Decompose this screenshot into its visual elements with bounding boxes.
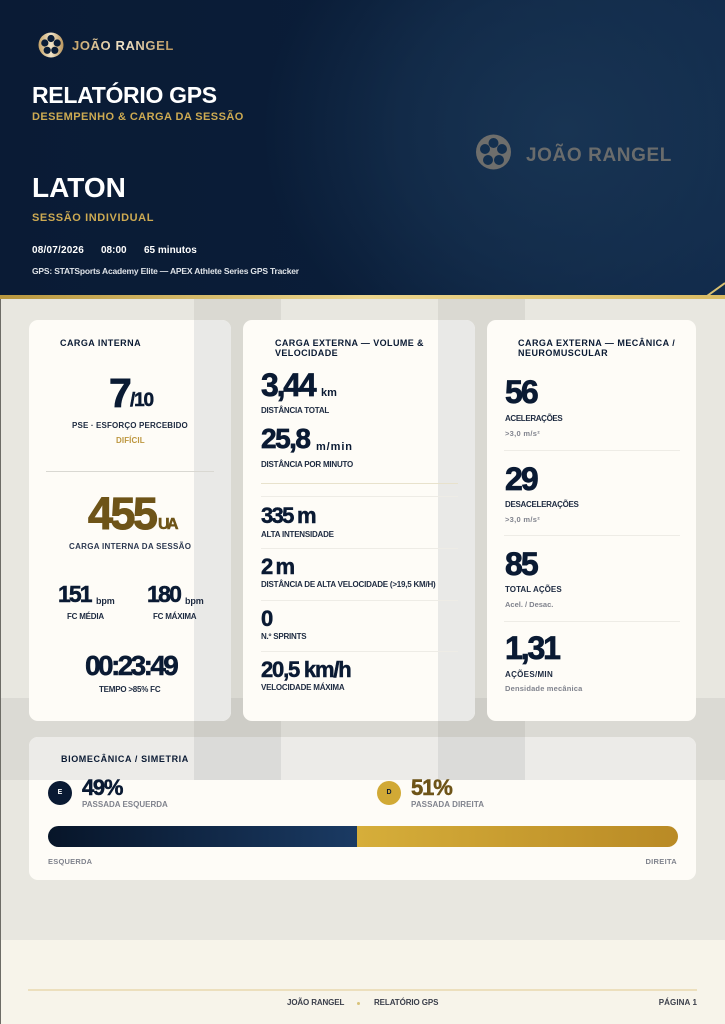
time above 85% value: 00:23:49	[85, 650, 176, 680]
max speed value: 20,5 km/h	[261, 657, 350, 682]
time above 85% label: TEMPO >85% FC	[99, 685, 160, 694]
title: RELATÓRIO GPS	[32, 82, 217, 108]
total actions value: 85	[505, 546, 537, 582]
sprints label: N.º SPRINTS	[261, 632, 306, 641]
maximum heart rate unit: bpm	[185, 596, 204, 606]
total distance label: DISTÂNCIA TOTAL	[261, 406, 329, 415]
distance per minute value: 25,8	[261, 422, 310, 454]
PSE label: PSE · ESFORÇO PERCEBIDO	[72, 421, 188, 430]
sprints value: 0	[261, 606, 273, 631]
session time: 08:00	[101, 244, 127, 256]
heading	[275, 338, 424, 358]
accelerations value: 56	[505, 374, 537, 410]
total actions label: TOTAL AÇÕES	[505, 585, 562, 594]
panel: biomecanica	[29, 737, 696, 880]
heading	[518, 338, 675, 358]
PSE value: 7	[109, 370, 132, 416]
right badge: D	[386, 789, 392, 796]
corner accent	[706, 282, 725, 296]
left badge	[48, 781, 72, 805]
footer report name: RELATÓRIO GPS	[374, 998, 438, 1007]
logo	[38, 32, 174, 58]
average heart rate unit: bpm	[96, 596, 115, 606]
page number: PÁGINA 1	[659, 998, 697, 1007]
heading: CARGA INTERNA	[60, 338, 141, 348]
right label: PASSADA DIREITA	[411, 800, 484, 809]
heading: BIOMECÂNICA / SIMETRIA	[61, 754, 189, 764]
decelerations threshold: >3,0 m/s²	[505, 515, 540, 524]
max speed label: VELOCIDADE MÁXIMA	[261, 683, 344, 692]
gold rule	[0, 295, 725, 299]
footer brand: JOÃO RANGEL	[287, 998, 344, 1007]
right axis label: DIREITA	[645, 857, 677, 866]
left axis label: ESQUERDA	[48, 857, 92, 866]
watermark logo	[476, 134, 672, 170]
total distance unit: km	[321, 387, 337, 399]
high speed distance label: DISTÂNCIA DE ALTA VELOCIDADE (>19,5 KM/H)	[261, 580, 435, 589]
left label: PASSADA ESQUERDA	[82, 800, 168, 809]
panel: carga interna	[29, 320, 231, 721]
session load unit: UA	[158, 516, 176, 533]
average heart rate: 151	[58, 581, 91, 607]
panel: carga externa volume	[243, 320, 475, 721]
decelerations value: 29	[505, 461, 537, 497]
maximum heart rate label: FC MÁXIMA	[153, 612, 196, 621]
total distance value: 3,44	[261, 367, 314, 403]
high intensity value: 335 m	[261, 503, 315, 528]
panel: carga externa mecanica	[487, 320, 696, 721]
decelerations label: DESACELERAÇÕES	[505, 500, 579, 509]
left segment	[48, 826, 357, 847]
session duration: 65 minutos	[144, 244, 197, 256]
panel: carga externa volume content	[261, 338, 458, 692]
right segment	[357, 826, 678, 847]
left badge: E	[58, 789, 62, 796]
session type: SESSÃO INDIVIDUAL	[32, 212, 154, 224]
heading: NEUROMUSCULAR	[518, 348, 608, 358]
accelerations label: ACELERAÇÕES	[505, 414, 562, 423]
accelerations threshold: >3,0 m/s²	[505, 429, 540, 438]
gold divider	[261, 483, 458, 484]
PSE scale: /10	[130, 390, 153, 411]
total actions note: Acel. / Desac.	[505, 600, 553, 609]
gps device: GPS: STATSports Academy Elite — APEX Athlete Series GPS Tracker	[32, 266, 299, 276]
high speed distance value: 2 m	[261, 554, 293, 579]
average heart rate label: FC MÉDIA	[67, 612, 104, 621]
actions per minute label: AÇÕES/MIN	[505, 670, 553, 679]
session date: 08/07/2026	[32, 244, 84, 256]
divider	[46, 471, 214, 472]
athlete name: LATON	[32, 172, 126, 202]
left value: 49%	[82, 775, 122, 800]
actions per minute value: 1,31	[505, 630, 559, 666]
heading: CARGA EXTERNA — VOLUME &	[275, 338, 424, 348]
subtitle: DESEMPENHO & CARGA DA SESSÃO	[32, 111, 244, 123]
right badge	[377, 781, 401, 805]
header	[0, 0, 725, 299]
panel: carga interna content	[46, 338, 214, 694]
heading: CARGA EXTERNA — MECÂNICA /	[518, 338, 675, 348]
distance per minute label: DISTÂNCIA POR MINUTO	[261, 460, 353, 469]
maximum heart rate: 180	[147, 581, 180, 607]
heading: VELOCIDADE	[275, 348, 338, 358]
session load value: 455	[88, 488, 155, 539]
logo: JOÃO RANGEL	[72, 38, 174, 53]
footer separator	[357, 1002, 360, 1005]
distance per minute unit: m/min	[316, 441, 353, 453]
symmetry bar	[48, 826, 678, 847]
actions per minute note: Densidade mecânica	[505, 684, 582, 693]
high intensity label: ALTA INTENSIDADE	[261, 530, 334, 539]
right value: 51%	[411, 775, 452, 800]
session load label: CARGA INTERNA DA SESSÃO	[69, 542, 191, 551]
PSE rating: DIFÍCIL	[116, 436, 145, 445]
footer	[0, 940, 725, 1024]
background bands	[0, 299, 725, 940]
watermark logo: JOÃO RANGEL	[526, 144, 672, 166]
